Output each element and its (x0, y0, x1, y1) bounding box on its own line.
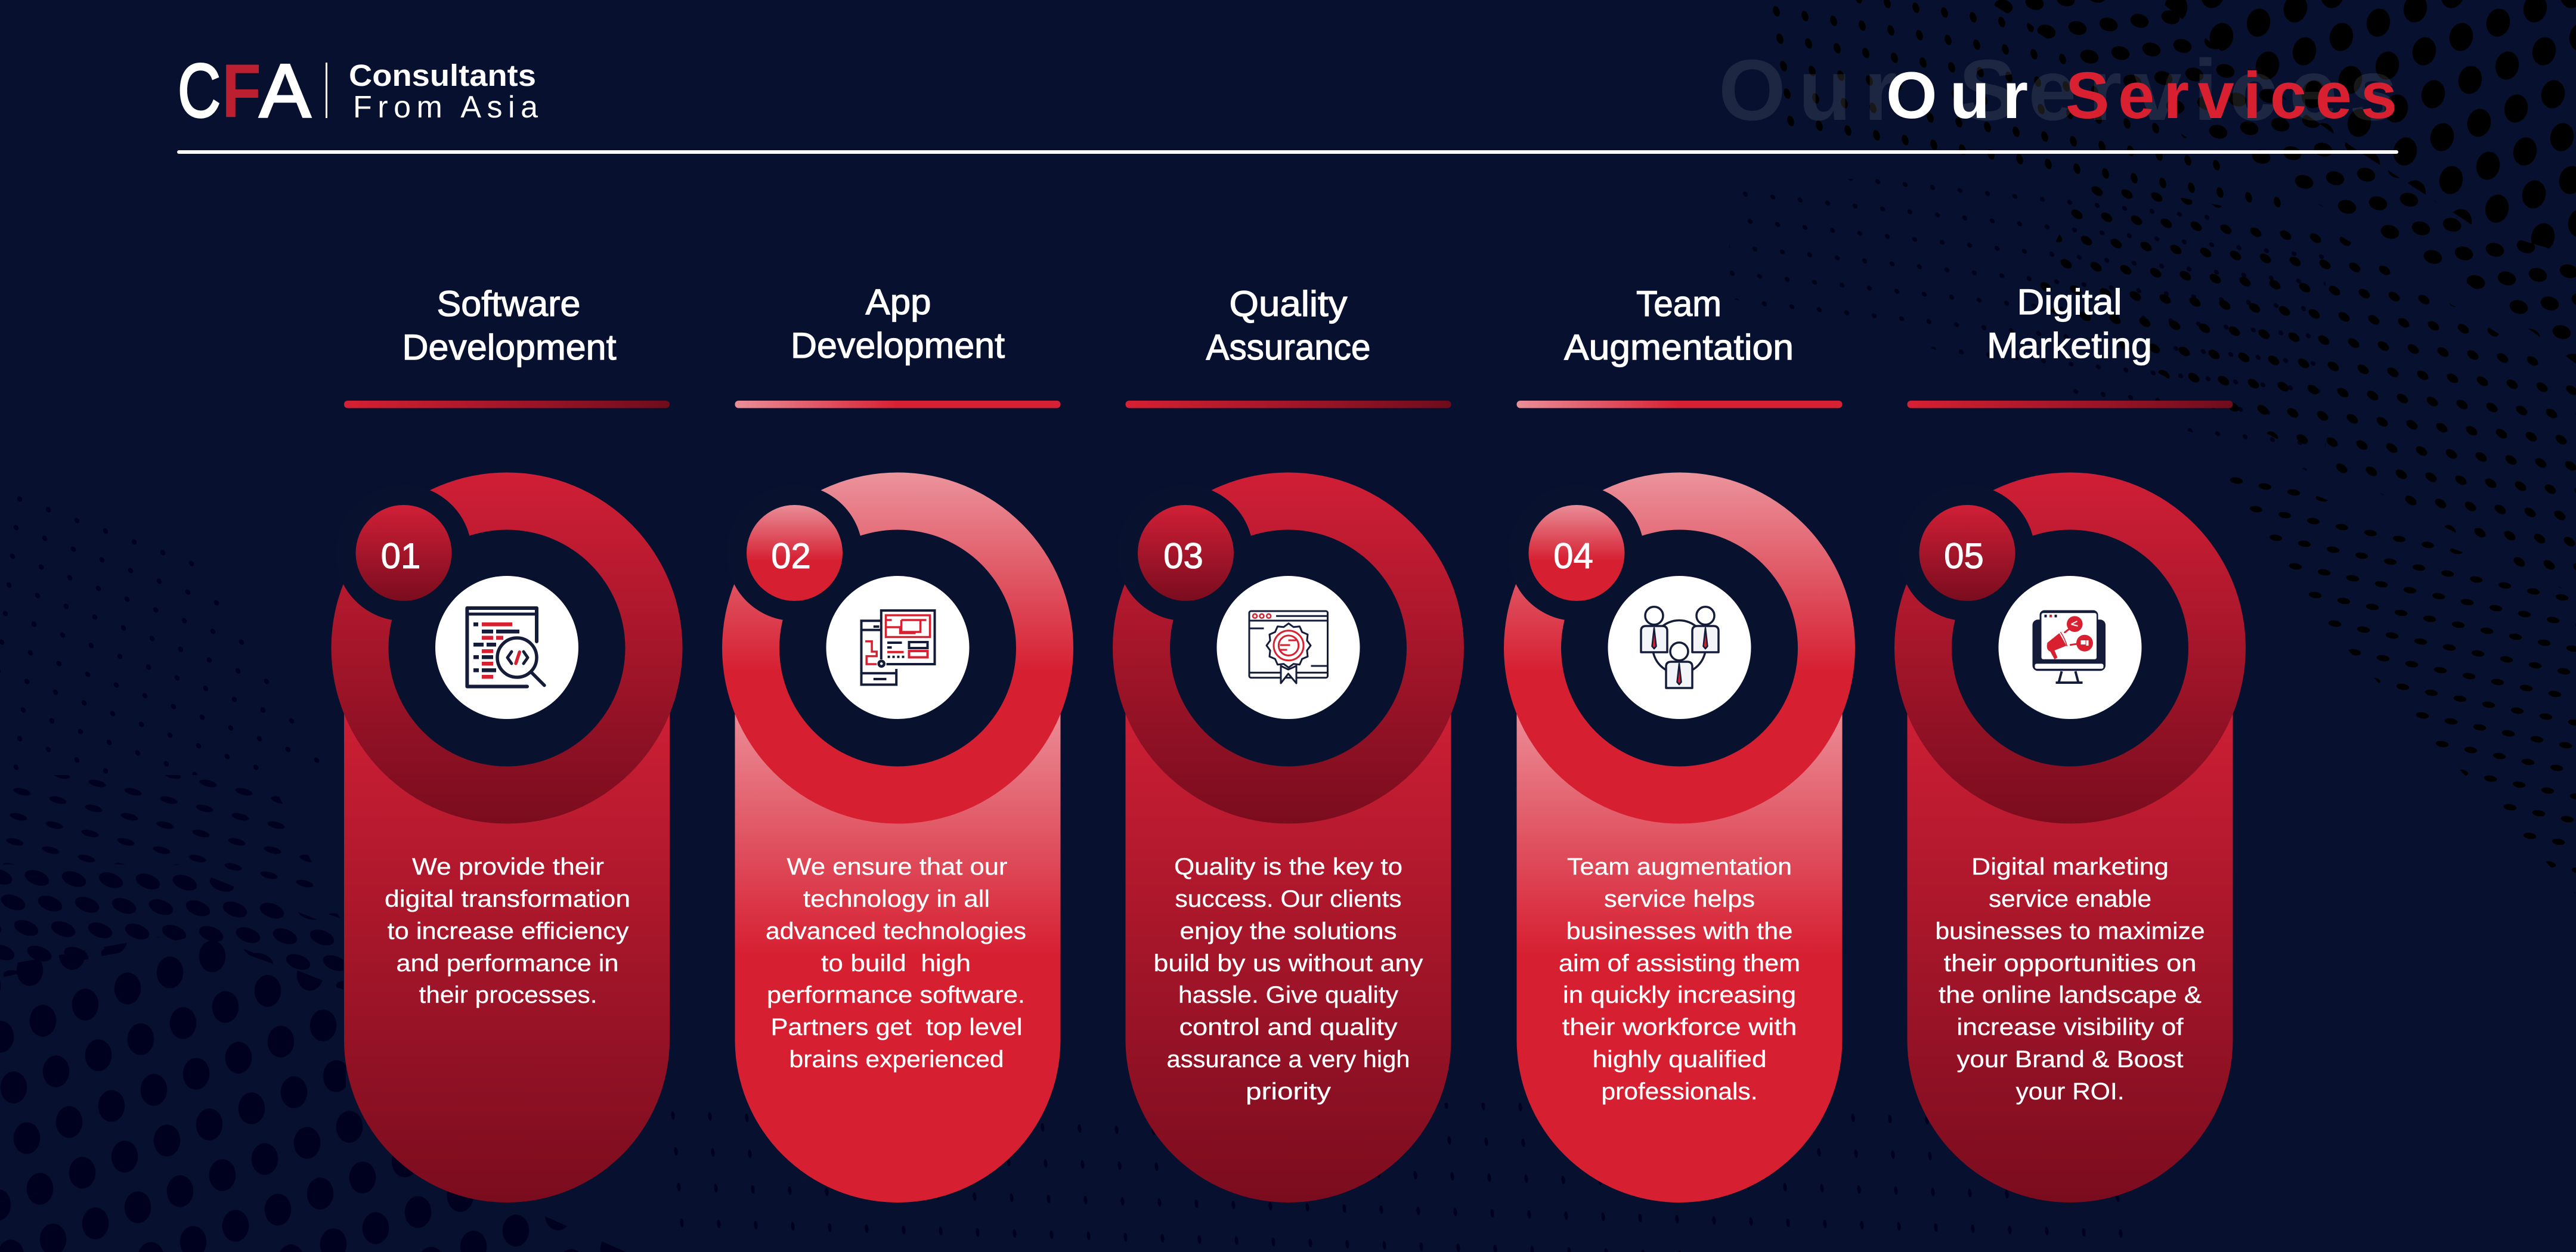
white icon circle (1216, 576, 1360, 719)
heading underline (344, 401, 670, 408)
body text: the online landscape & (1939, 982, 2202, 1008)
body text: enjoy the solutions (1179, 918, 1397, 944)
heading: Quality Assurance: Quality (1230, 284, 1348, 324)
body text (385, 854, 630, 1008)
icon: team of three people (1641, 607, 1719, 688)
heading underline (1126, 401, 1451, 408)
pill body (1517, 648, 1843, 1203)
body text: increase visibility of (1957, 1014, 2184, 1040)
body text: control and quality (1179, 1014, 1398, 1040)
panel: 05 Digital Marketing (1894, 282, 2246, 1203)
body text: performance software. (767, 982, 1025, 1008)
body text: Quality is the key to (1174, 854, 1402, 880)
body text: businesses with the (1566, 918, 1792, 944)
body text: service enable (1989, 886, 2151, 912)
heading: Quality Assurance: Assurance (1206, 327, 1370, 367)
body text: We ensure that our (787, 854, 1008, 880)
body text: brains experienced (789, 1046, 1004, 1073)
pill body (344, 648, 670, 1203)
body text: Partners get top level (770, 1014, 1022, 1040)
icon: quality badge in browser (1249, 611, 1327, 683)
heading: Quality Assurance (1206, 284, 1370, 367)
number badge 04 (1529, 505, 1624, 601)
logo: CFA Consultants From Asia: F (222, 48, 261, 133)
icon: app and tablet wireframe (861, 610, 935, 684)
number badge 05: 05 (1944, 536, 1984, 576)
heading: Software Development (402, 284, 617, 367)
body text: your ROI. (2016, 1079, 2124, 1105)
body text: professionals. (1602, 1079, 1758, 1105)
heading: App Development: Development (791, 326, 1005, 365)
icon: code inspection (467, 608, 544, 687)
body text: technology in all (803, 886, 990, 912)
heading: Software Development: Development (402, 327, 617, 367)
header rule (177, 150, 2398, 154)
title: Our Services: Services (2066, 59, 2397, 132)
heading underline (1517, 401, 1843, 408)
number badge 04: 04 (1553, 536, 1593, 576)
body text: highly qualified (1592, 1046, 1767, 1073)
body text: your Brand & Boost (1957, 1046, 2184, 1073)
body text: their workforce with (1562, 1014, 1797, 1040)
number badge 01: 01 (381, 536, 420, 576)
body text (1559, 854, 1800, 1105)
heading: App Development (791, 282, 1005, 365)
ring (1113, 472, 1464, 824)
title: Our Services: Our (1886, 59, 2028, 132)
body text: We provide their (412, 854, 604, 880)
body text: their processes. (419, 982, 597, 1008)
logo: CFA Consultants From Asia: C (178, 48, 221, 133)
panel: 01 Software Development (332, 284, 682, 1203)
number badge 03 (1138, 505, 1234, 601)
body text: service helps (1604, 886, 1755, 912)
number badge 01 (355, 505, 452, 601)
body text (1153, 854, 1423, 1105)
white icon circle (1999, 576, 2142, 719)
ring (1894, 472, 2246, 824)
ring (332, 472, 682, 824)
body text: build by us without any (1153, 950, 1423, 977)
body text: hassle. Give quality (1178, 982, 1398, 1008)
pill body (1907, 648, 2233, 1203)
heading: Digital Marketing: Marketing (1987, 326, 2152, 365)
logo: CFA Consultants From Asia: A (259, 48, 311, 133)
title ghost: Our Services: Our (1719, 42, 1897, 138)
heading underline (735, 401, 1060, 408)
heading: Team Augmentation: Team (1636, 284, 1722, 324)
number badge 03: 03 (1163, 536, 1203, 576)
body text: priority (1246, 1079, 1331, 1105)
number badge 02: 02 (771, 536, 811, 576)
body text: to build high (821, 950, 971, 977)
ring (722, 472, 1073, 824)
heading: Software Development: Software (437, 284, 580, 324)
number badge 05 (1919, 505, 2015, 601)
panel: 04 Team Augmentation (1504, 284, 1855, 1203)
ring (1504, 472, 1855, 824)
body text: their opportunities on (1944, 950, 2197, 977)
body text: Digital marketing (1971, 854, 2169, 880)
heading: Team Augmentation: Augmentation (1564, 327, 1794, 367)
body text: assurance a very high (1166, 1046, 1410, 1073)
number badge 02 (747, 505, 843, 601)
body text: aim of assisting them (1559, 950, 1800, 977)
body text: success. Our clients (1175, 886, 1401, 912)
pill body (735, 648, 1060, 1203)
body text: Team augmentation (1567, 854, 1792, 880)
body text: to increase efficiency (388, 918, 628, 944)
body text: businesses to maximize (1936, 918, 2205, 944)
body text: digital transformation (385, 886, 630, 912)
title ghost: Our Services (1719, 42, 2397, 138)
body text (766, 854, 1026, 1073)
body text: and performance in (396, 950, 619, 977)
heading: Digital Marketing: Digital (2017, 282, 2122, 322)
icon: digital marketing monitor (2032, 610, 2106, 683)
title ghost: Our Services: Services (1959, 42, 2397, 138)
body text (1936, 854, 2205, 1105)
body text: in quickly increasing (1563, 982, 1796, 1008)
panel: 03 Quality Assurance (1113, 284, 1464, 1203)
white icon circle (826, 576, 970, 719)
heading: Digital Marketing (1987, 282, 2152, 365)
logo: CFA Consultants From Asia: Consultants (349, 58, 536, 92)
title: Our Services (1886, 59, 2397, 132)
white icon circle (435, 576, 578, 719)
pill body (1126, 648, 1451, 1203)
heading underline (1907, 401, 2233, 408)
heading: Team Augmentation (1564, 284, 1794, 367)
panel: 02 App Development (722, 282, 1073, 1203)
logo: CFA Consultants From Asia: From Asia (353, 90, 538, 125)
logo: CFA Consultants From Asia (178, 48, 538, 133)
heading: App Development: App (866, 282, 931, 322)
body text: advanced technologies (766, 918, 1026, 944)
white icon circle (1608, 576, 1751, 719)
